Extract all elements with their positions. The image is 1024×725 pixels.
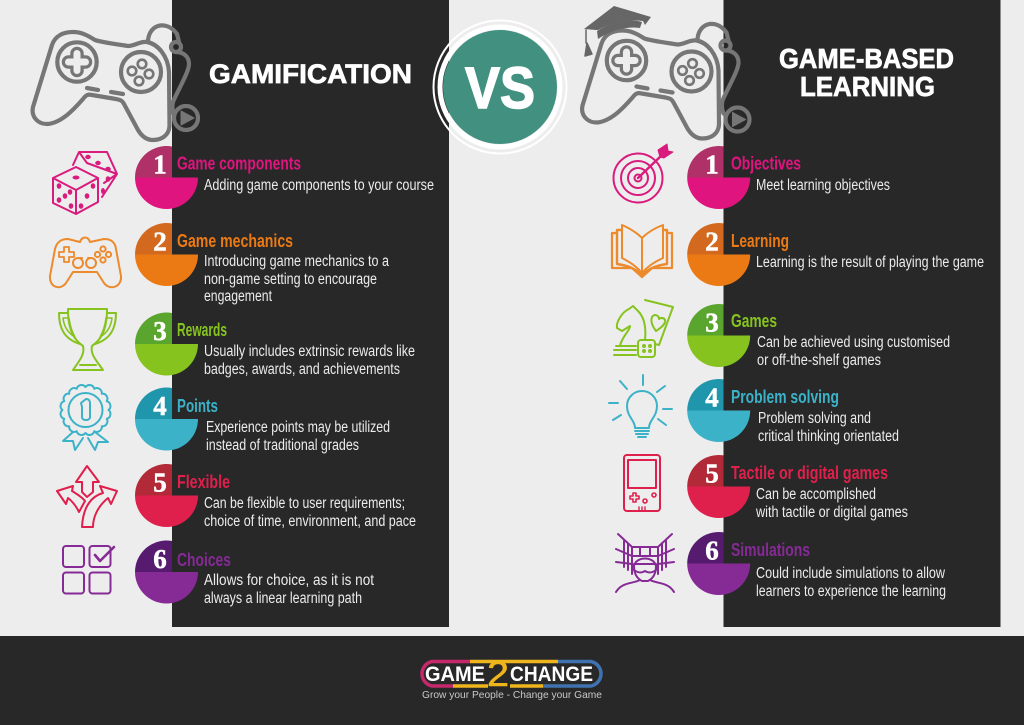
- footer band: [0, 636, 1024, 725]
- description: [757, 334, 950, 369]
- panel: game-based learning dark column: [724, 0, 1000, 627]
- icon: gamepad: [50, 238, 121, 287]
- heading: Games: [731, 311, 777, 331]
- heading: Choices: [177, 550, 231, 570]
- item: points: [61, 385, 390, 454]
- logo: Game2Change: Grow your People - Change your Game: [422, 689, 602, 701]
- description: [204, 343, 415, 378]
- icon: game controller with graduation cap: [582, 6, 750, 138]
- description: non-game setting to encourage: [204, 271, 377, 288]
- description: Meet learning objectives: [756, 177, 890, 194]
- description: or off-the-shelf games: [757, 352, 881, 369]
- heading: Points: [177, 396, 218, 416]
- description: always a linear learning path: [204, 590, 362, 607]
- description: [206, 419, 390, 454]
- number badge 1: 1: [705, 150, 719, 180]
- description: Problem solving and: [758, 410, 871, 427]
- VS badge: VS: [465, 56, 535, 121]
- heading: Learning: [731, 231, 789, 251]
- number badge 6: 6: [153, 544, 167, 574]
- description: Introducing game mechanics to a: [204, 253, 389, 270]
- item: rewards: [59, 309, 415, 378]
- icon: diverging arrows: [57, 466, 117, 527]
- number badge 3: [687, 304, 750, 367]
- number badge 5: [687, 455, 750, 518]
- item: objectives: [614, 144, 890, 209]
- icon: game controller left: [33, 25, 198, 140]
- logo: Game2Change: CHANGE: [510, 663, 593, 686]
- item: simulations: [616, 532, 946, 600]
- description: Can be achieved using customised: [757, 334, 950, 351]
- heading: gamification: GAMIFICATION: [209, 59, 412, 89]
- heading: game-based learning: [779, 43, 954, 102]
- heading: Objectives: [731, 154, 801, 174]
- heading: Game components: [177, 154, 301, 174]
- number badge 4: 4: [153, 391, 167, 421]
- item: choices: [63, 541, 375, 607]
- heading: Rewards: [177, 320, 227, 340]
- description: Experience points may be utilized: [206, 419, 390, 436]
- heading: game-based learning: GAME-BASED: [779, 43, 954, 74]
- number badge 1: [135, 146, 198, 209]
- number badge 6: [687, 532, 750, 595]
- number badge 3: 3: [153, 316, 167, 346]
- description: Could include simulations to allow: [756, 565, 946, 582]
- number badge 6: 6: [705, 536, 719, 566]
- heading: Problem solving: [731, 387, 839, 407]
- icon: handheld console: [624, 455, 660, 511]
- item: game mechanics: [50, 223, 389, 305]
- number badge 6: [135, 541, 198, 604]
- description: critical thinking orientated: [758, 428, 899, 445]
- description: Adding game components to your course: [204, 177, 434, 194]
- heading: Game mechanics: [177, 231, 293, 251]
- number badge 1: [687, 146, 750, 209]
- description: [758, 410, 899, 445]
- number badge 1: 1: [153, 150, 167, 180]
- item: learning: [612, 223, 984, 286]
- description: [755, 486, 908, 521]
- number badge 2: [135, 223, 198, 286]
- description: badges, awards, and achievements: [204, 361, 400, 378]
- icon: VR headset in virtual grid: [616, 534, 674, 592]
- description: engagement: [204, 288, 273, 305]
- logo: Game2Change: GAME: [425, 663, 485, 686]
- number badge 5: 5: [153, 468, 167, 498]
- description: Can be accomplished: [756, 486, 876, 503]
- description: with tactile or digital games: [755, 504, 908, 521]
- icon: light bulb: [609, 375, 672, 437]
- description: Can be flexible to user requirements;: [204, 495, 405, 512]
- description: instead of traditional grades: [206, 437, 359, 454]
- description: choice of time, environment, and pace: [204, 513, 416, 530]
- item: games: [614, 300, 950, 369]
- number badge 2: [687, 223, 750, 286]
- number badge 2: 2: [705, 226, 719, 256]
- VS badge: [434, 20, 566, 154]
- icon: dice: [53, 152, 117, 214]
- panel: gamification dark column: [172, 0, 449, 627]
- number badge 3: 3: [705, 308, 719, 338]
- icon: open book: [612, 225, 672, 277]
- number badge 5: 5: [705, 458, 719, 488]
- number badge 4: [135, 388, 198, 451]
- description: Allows for choice, as it is not: [204, 572, 375, 589]
- item: game components: [53, 146, 434, 214]
- item: problem solving: [609, 375, 899, 445]
- description: learners to experience the learning: [756, 583, 946, 600]
- number badge 5: [135, 464, 198, 527]
- item: flexible: [57, 464, 416, 530]
- item: tactile or digital games: [624, 455, 908, 521]
- icon: checkbox grid: [63, 546, 114, 594]
- heading: Tactile or digital games: [731, 463, 888, 483]
- icon: chess knight, card and die: [614, 300, 673, 357]
- heading: Flexible: [177, 472, 230, 492]
- icon: trophy: [59, 309, 116, 370]
- number badge 2: 2: [153, 226, 167, 256]
- number badge 4: 4: [705, 382, 719, 412]
- description: [204, 572, 375, 607]
- description: Usually includes extrinsic rewards like: [204, 343, 415, 360]
- number badge 3: [135, 313, 198, 376]
- number badge 4: [687, 379, 750, 442]
- description: [204, 253, 389, 305]
- description: [204, 495, 416, 530]
- description: [756, 565, 946, 600]
- heading: Simulations: [731, 540, 810, 560]
- logo: Game2Change: 2: [487, 655, 509, 694]
- heading: game-based learning: LEARNING: [800, 71, 935, 102]
- logo: Game2Change: [422, 655, 602, 701]
- icon: medal: [61, 385, 110, 450]
- icon: target: [614, 144, 673, 202]
